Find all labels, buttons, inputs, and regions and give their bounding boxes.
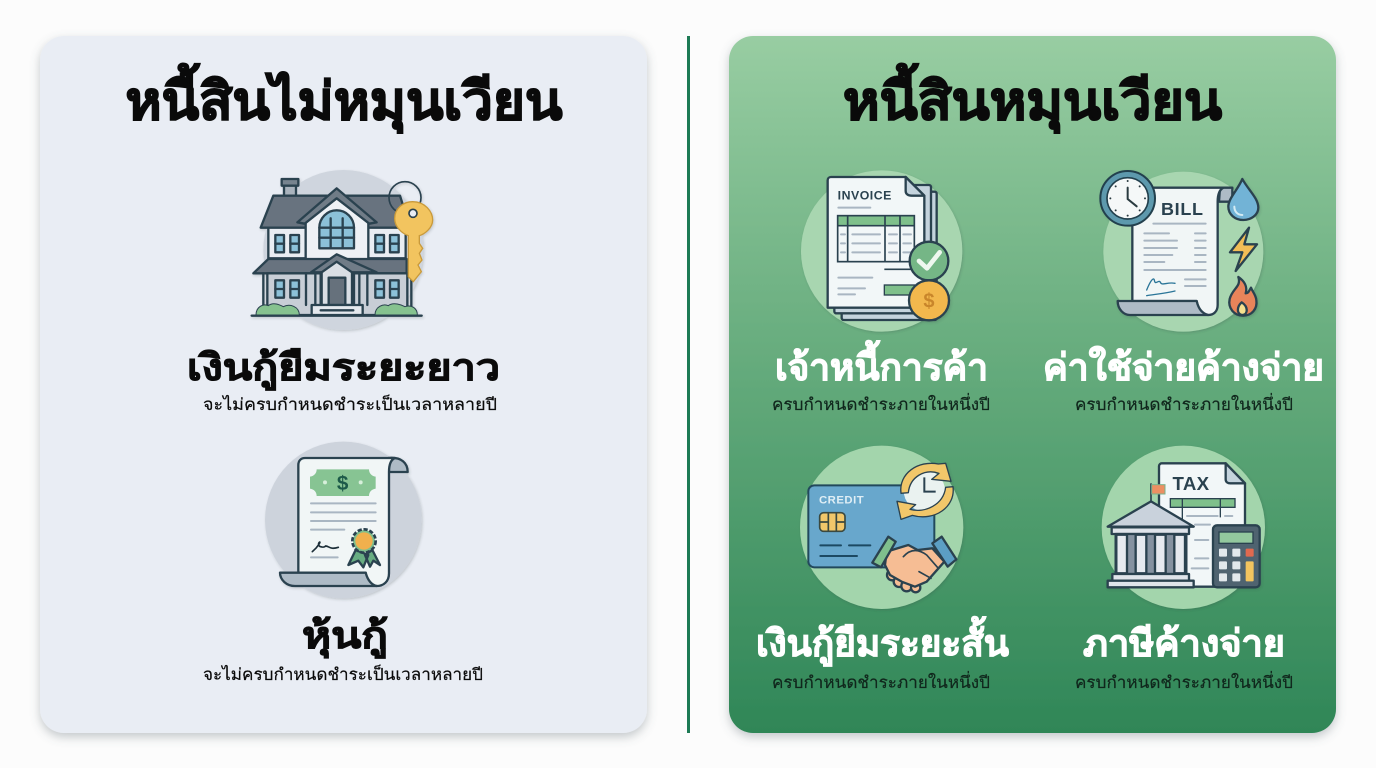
subheading: short-term loans: เงินกู้ยืมระยะสั้น [756, 616, 1009, 667]
description: accrued taxes: ครบกำหนดชำระภายในหนึ่งปี [1075, 671, 1293, 692]
subheading: trade payables: เจ้าหนี้การค้า [775, 340, 988, 388]
subheading: accrued taxes: ภาษีค้างจ่าย [1083, 623, 1285, 664]
panel: non-current liabilities [40, 36, 647, 733]
description: trade payables: ครบกำหนดชำระภายในหนึ่งปี [772, 393, 990, 414]
icon: credit card with handshake: CREDIT [819, 494, 864, 506]
icon: credit card with handshake [800, 446, 963, 609]
divider [687, 36, 690, 733]
heading: current liabilities: หนี้สินหมุนเวียน [843, 63, 1222, 134]
icon: tax form, bank building and calculator: TAX [1173, 473, 1210, 494]
icon: bill with clock and utilities [1100, 171, 1263, 332]
description: short-term loans: ครบกำหนดชำระภายในหนึ่งปี [772, 671, 990, 692]
subheading: accrued expenses: ค่าใช้จ่ายค้างจ่าย [1043, 345, 1324, 388]
panel: current liabilities [729, 36, 1336, 733]
heading: non-current liabilities: หนี้สินไม่หมุนเวียน [126, 63, 563, 134]
subheading: bonds: หุ้นกู้ [302, 615, 388, 659]
icon: invoice [801, 170, 962, 332]
icon: house with key [252, 170, 433, 330]
description: bonds: จะไม่ครบกำหนดชำระเป็นเวลาหลายปี [203, 664, 483, 684]
icon: tax form, bank building and calculator [1102, 446, 1265, 609]
icon: invoice: $ [923, 291, 935, 313]
subheading: long-term loans: เงินกู้ยืมระยะยาว [187, 347, 500, 391]
description: accrued expenses: ครบกำหนดชำระภายในหนึ่งปี [1075, 393, 1293, 414]
icon: bond certificate: $ [337, 472, 349, 495]
icon: invoice: INVOICE [838, 189, 892, 203]
icon: bill with clock and utilities: BILL [1161, 199, 1204, 219]
description: long-term loans: จะไม่ครบกำหนดชำระเป็นเวลาหลายปี [203, 394, 497, 414]
icon: bond certificate [265, 442, 422, 598]
